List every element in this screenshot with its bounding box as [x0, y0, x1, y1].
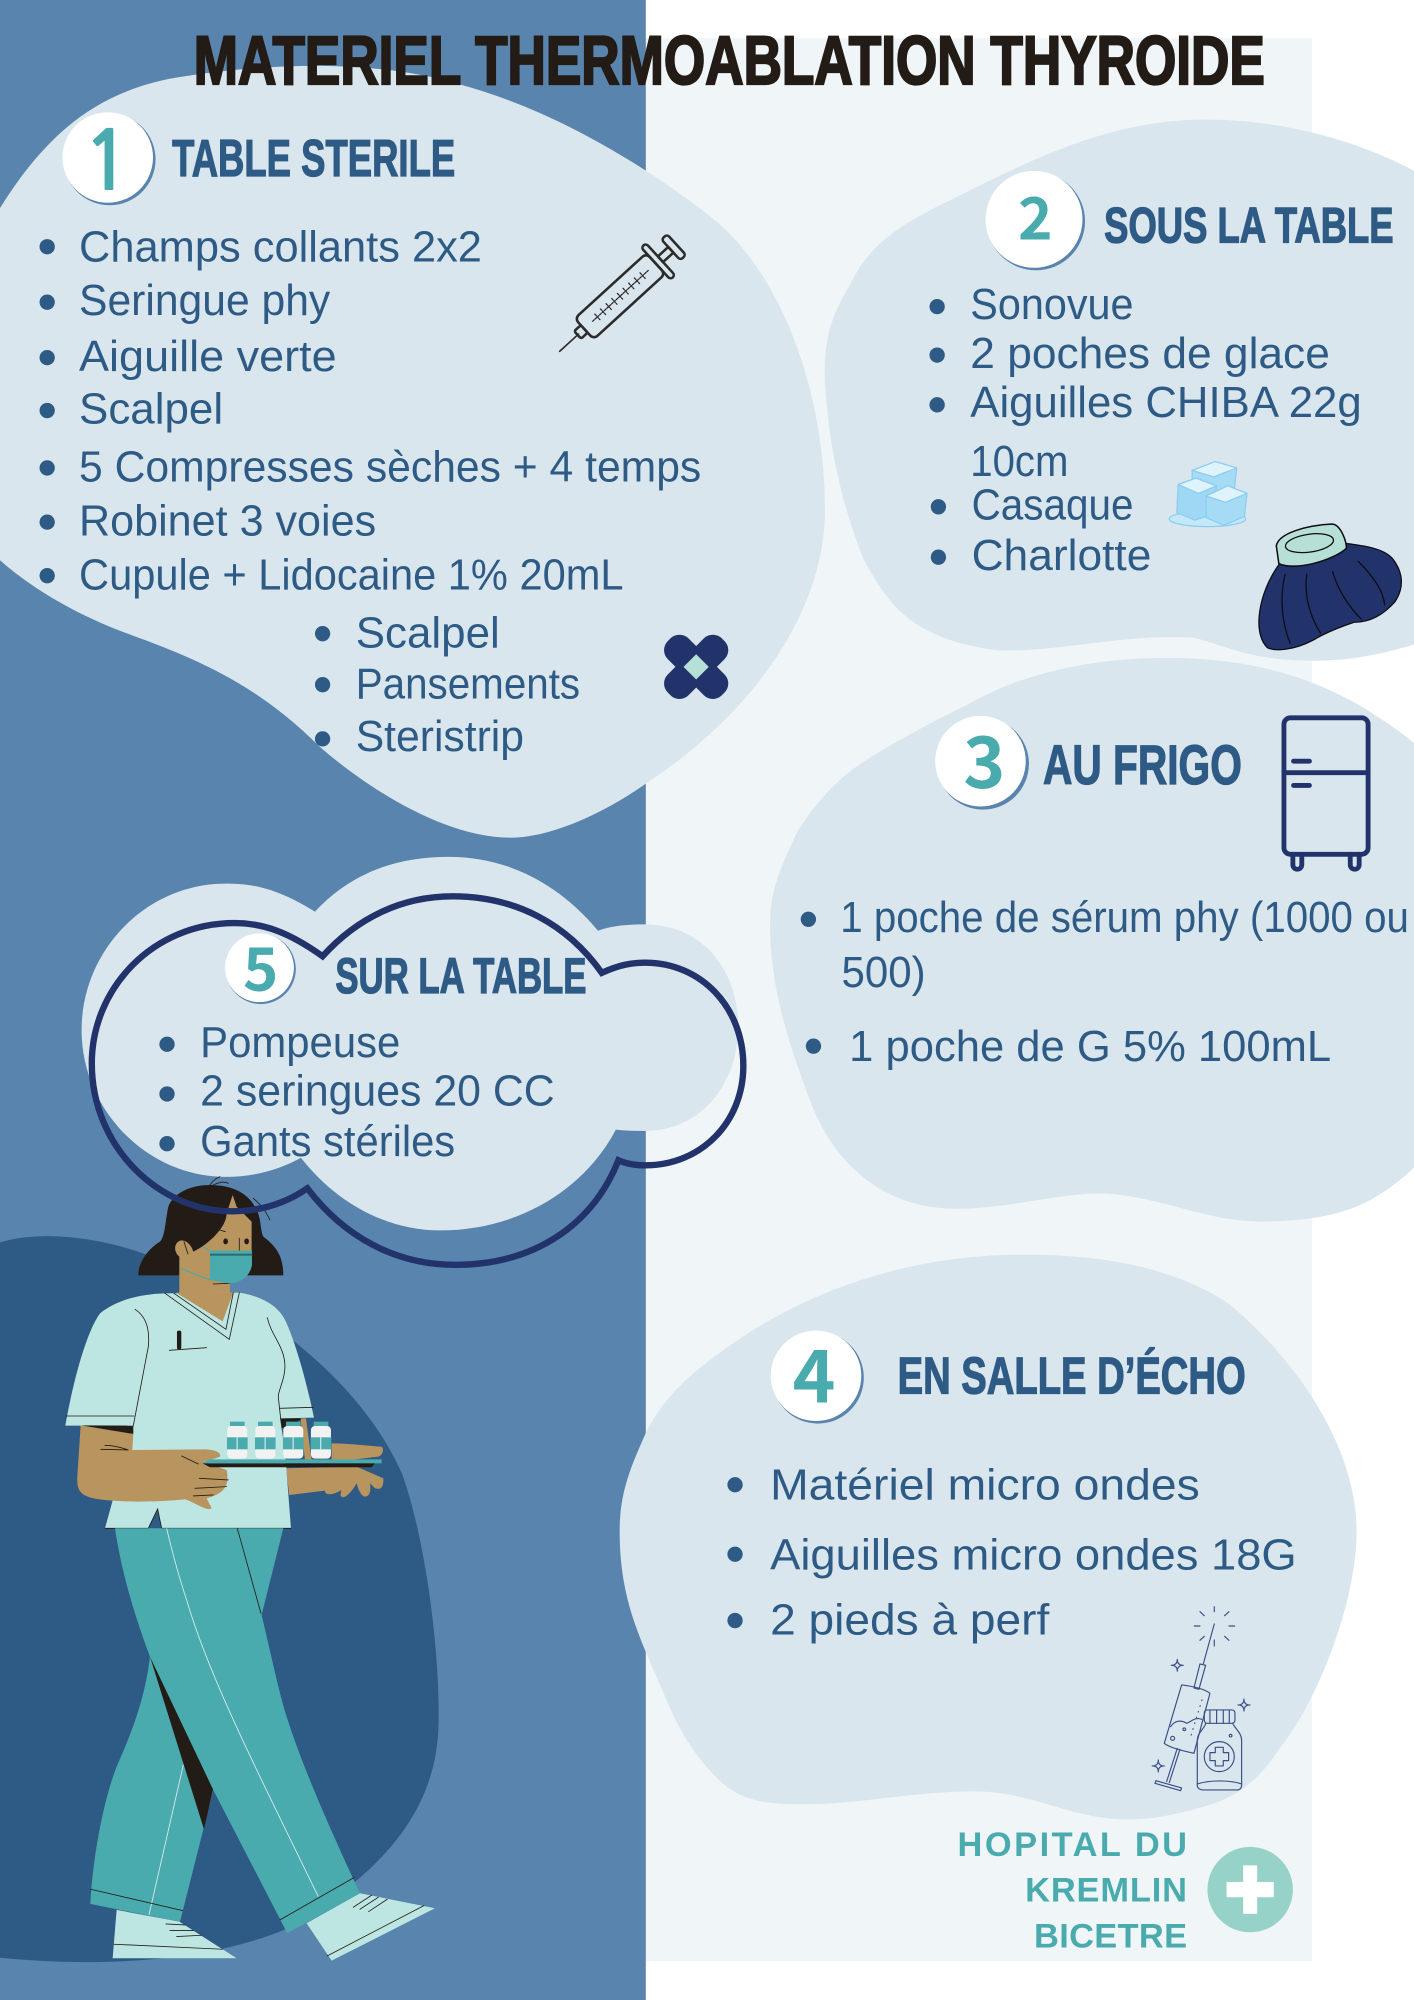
number badge 4: 4: [793, 1319, 836, 1424]
list: sous la table items: 2 poches de glace: [970, 330, 1330, 378]
thought cloud outline: [92, 896, 743, 1265]
shirt: [65, 1293, 314, 1528]
list: sur la table items: 2 seringues 20 CC: [200, 1067, 555, 1115]
list: en salle d'echo items: [727, 1461, 1297, 1645]
panel text: sur la table: [159, 922, 587, 1166]
number badge 4: [771, 1319, 864, 1424]
trousers: [90, 1528, 360, 1933]
number badge 5: [225, 922, 296, 1009]
icon: bandage: [659, 629, 734, 704]
neck opening: [176, 1293, 233, 1321]
right arm under tray: [286, 1467, 383, 1497]
number badge 3: [935, 705, 1029, 810]
list: sous la table items: 10cm: [970, 438, 1068, 486]
icon: ice pack: [1259, 524, 1401, 650]
shoes: [113, 1893, 435, 1961]
dark blob behind figure: [0, 1236, 439, 1962]
panel: sous la table: [825, 120, 1414, 661]
shirt lines: [66, 1293, 313, 1528]
list: table sterile items: Aiguille verte: [79, 333, 337, 381]
panel: en salle d'echo: [620, 1255, 1357, 1819]
number badge 5: 5: [243, 922, 278, 1009]
panel: table sterile: [0, 66, 825, 838]
face details and mask: [180, 1177, 270, 1284]
list: sur la table items: Pompeuse: [200, 1019, 400, 1067]
list: table sterile items: 5 Compresses sèches + 4 temps: [79, 443, 701, 491]
hair: [138, 1185, 283, 1275]
left arm and hand: [77, 1425, 228, 1509]
list: table sterile items: [40, 223, 701, 761]
list: sous la table items: Sonovue: [970, 281, 1133, 329]
list: table sterile items: Cupule + Lidocaine 1% 20mL: [79, 552, 623, 600]
footer: hospital name: KREMLIN: [1025, 1872, 1187, 1910]
illustration: nurse carrying tray: [65, 1177, 435, 1961]
list: table sterile items: Champs collants 2x2: [79, 223, 482, 271]
list: sous la table items: Charlotte: [972, 532, 1151, 580]
list: table sterile items: Seringue phy: [79, 277, 331, 325]
heading: sur la table: SUR LA TABLE: [335, 948, 587, 1004]
list: en salle d'echo items: Aiguilles micro ondes 18G: [770, 1532, 1297, 1580]
footer: hospital name: HOPITAL DU: [958, 1826, 1187, 1864]
list: sous la table items: Aiguilles CHIBA 22g: [970, 379, 1362, 427]
icon: fridge: [1284, 718, 1368, 869]
number badge 1: 1: [82, 122, 132, 203]
number badge 3: 3: [963, 705, 1005, 809]
panel: au frigo: [770, 658, 1414, 1221]
face and neck: [175, 1195, 252, 1297]
icon: ice cubes: [1169, 462, 1247, 527]
list: au frigo items: 500): [842, 949, 926, 997]
list: table sterile items: Scalpel: [79, 385, 223, 433]
list: table sterile items: Scalpel: [356, 610, 500, 658]
list: en salle d'echo items: Matériel micro ondes: [770, 1461, 1200, 1509]
list: en salle d'echo items: 2 pieds à perf: [770, 1597, 1050, 1645]
list: sous la table items: [929, 281, 1362, 580]
list: au frigo items: 1 poche de G 5% 100mL: [849, 1023, 1331, 1071]
heading: table sterile: TABLE STERILE: [172, 130, 455, 188]
number badge 2: 2: [1018, 172, 1053, 257]
vials on tray: [227, 1422, 331, 1459]
icon: syringe: [545, 229, 691, 367]
list: au frigo items: [801, 894, 1409, 1071]
number badge 1: [62, 112, 156, 205]
list: sur la table items: Gants stériles: [200, 1118, 455, 1166]
list: sous la table items: Casaque: [972, 482, 1133, 530]
heading: en salle d'echo: EN SALLE D’ÉCHO: [898, 1348, 1246, 1406]
icon: hospital plus badge: [1207, 1847, 1293, 1932]
list: table sterile items: Pansements: [356, 661, 580, 709]
icon: syringe and vial outline: [1152, 1607, 1250, 1791]
thought cloud fill: [82, 857, 738, 1230]
heading: au frigo: AU FRIGO: [1043, 733, 1242, 796]
number badge 2: [986, 171, 1085, 270]
right hand thumb and wrist: [281, 1418, 383, 1460]
footer: hospital name: [958, 1826, 1187, 1956]
list: sur la table items: [159, 1019, 555, 1166]
list: table sterile items: Steristrip: [356, 713, 524, 761]
tray: [203, 1459, 382, 1467]
footer: hospital name: BICETRE: [1034, 1918, 1187, 1956]
list: table sterile items: Robinet 3 voies: [79, 498, 376, 546]
